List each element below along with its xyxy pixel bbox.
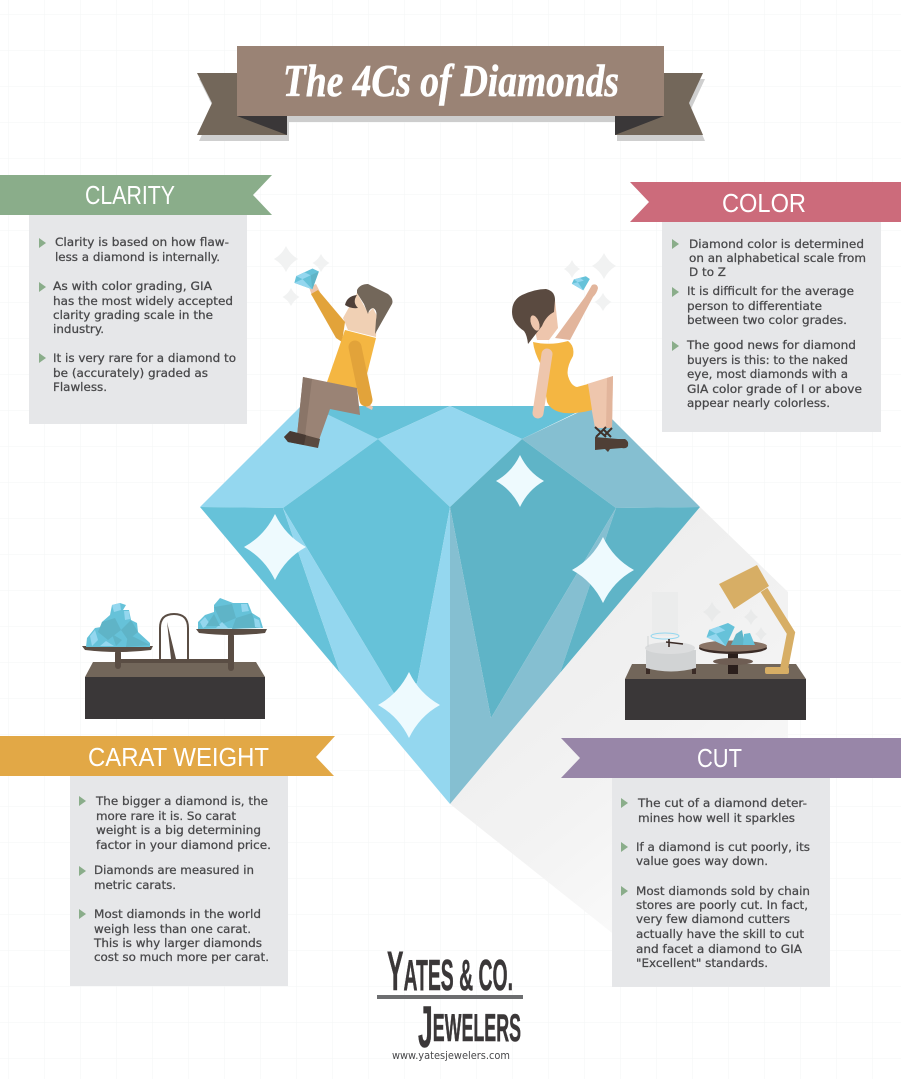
color text box: buyers is this: to the naked — [687, 354, 848, 367]
carat weight banner — [0, 736, 335, 776]
clarity text box: has the most widely accepted — [53, 295, 233, 308]
clarity text box: less a diamond is internally. — [55, 251, 220, 264]
carat weight text box: weigh less than one carat. — [94, 923, 251, 936]
cut heading: CUT — [697, 743, 742, 773]
color text box: on an alphabetical scale from — [689, 252, 866, 265]
cut text box — [612, 778, 830, 987]
clarity text box — [29, 215, 247, 424]
clarity heading: CLARITY — [85, 180, 175, 210]
arm — [538, 354, 547, 413]
carat weight text box: This is why larger diamonds — [93, 937, 262, 950]
left pan — [82, 646, 153, 652]
clarity text box: clarity grading scale in the — [53, 309, 213, 322]
color text box — [662, 222, 881, 432]
cut text box: very few diamond cutters — [636, 913, 790, 926]
cut text box: value goes way down. — [636, 855, 768, 868]
clarity text box: industry. — [53, 323, 104, 336]
balance scale with diamonds — [82, 598, 267, 719]
panel: carat weight — [0, 736, 335, 986]
microscope with glass dome — [645, 592, 696, 674]
clarity text box: Clarity is based on how flaw- — [55, 236, 229, 249]
title text: The 4Cs of Diamonds — [283, 55, 619, 106]
cut banner — [561, 738, 901, 778]
man's head — [343, 293, 377, 337]
carat weight text box: cost so much more per carat. — [94, 951, 269, 964]
shoe — [595, 437, 628, 452]
inspected diamonds — [705, 621, 755, 651]
cut text box: If a diamond is cut poorly, its — [636, 841, 810, 854]
carat weight text box: Most diamonds in the world — [94, 908, 261, 921]
clarity text box: As with color grading, GIA — [53, 280, 212, 293]
website: www.yatesjewelers.com — [392, 1050, 510, 1062]
panel: cut — [561, 738, 901, 987]
round stand — [699, 640, 767, 674]
color text box: D to Z — [689, 266, 726, 279]
color text box: Diamond color is determined — [689, 238, 864, 251]
cut text box: stores are poorly cut. In fact, — [636, 899, 808, 912]
color text box: between two color grades. — [687, 314, 847, 327]
color banner — [630, 182, 901, 222]
carat weight text box: weight is a big determining — [96, 824, 261, 837]
carat weight text box: The bigger a diamond is, the — [95, 795, 268, 808]
logo: Yates & Co. Jewelers: J — [418, 995, 433, 1060]
color text box: eye, most diamonds with a — [687, 368, 848, 381]
cut text box: mines how well it sparkles — [638, 812, 795, 825]
left diamond pile — [86, 603, 150, 647]
color text box: appear nearly colorless. — [687, 397, 830, 410]
carat weight text box: metric carats. — [94, 879, 176, 892]
carat weight text box: factor in your diamond price. — [96, 839, 271, 852]
sparkles — [703, 602, 767, 641]
raised arm — [555, 284, 598, 340]
raised arm — [311, 290, 345, 342]
color heading: COLOR — [722, 188, 806, 218]
panel: color — [630, 182, 901, 432]
cut text box: "Excellent" standards. — [636, 957, 768, 970]
dress — [533, 341, 592, 413]
cut text box: and facet a diamond to GIA — [636, 943, 802, 956]
hair — [512, 289, 555, 344]
man holding diamond — [274, 246, 392, 448]
color text box: GIA color grade of I or above — [687, 383, 862, 396]
shoe — [284, 431, 320, 448]
color text box: It is difficult for the average — [687, 285, 854, 298]
woman's sparkles — [564, 253, 616, 311]
clarity banner — [0, 175, 272, 215]
carat weight heading: CARAT WEIGHT — [88, 742, 269, 772]
carat weight text box: more rare it is. So carat — [96, 810, 237, 823]
lamp — [719, 565, 791, 674]
lower arm — [366, 403, 373, 410]
title ribbon — [197, 46, 705, 141]
text: EWELERS — [433, 1007, 521, 1050]
gem inspection table with lamp — [625, 565, 806, 720]
diamond shadow — [450, 507, 788, 987]
shirt — [327, 330, 376, 390]
woman's diamond — [571, 275, 592, 293]
man's sparkles — [274, 246, 330, 306]
cut text box: The cut of a diamond deter- — [637, 797, 807, 810]
right diamond pile — [198, 598, 263, 629]
clarity text box: It is very rare for a diamond to — [53, 352, 236, 365]
logo: Yates & Co. Jewelers: YATES & CO. — [387, 939, 513, 1002]
face — [533, 300, 558, 340]
sparkles on diamond — [244, 455, 634, 738]
trousers — [297, 377, 360, 440]
cut text box: Most diamonds sold by chain — [636, 885, 810, 898]
right pan — [196, 629, 267, 635]
man's diamond — [292, 267, 325, 295]
logo: Yates & Co. Jewelers — [377, 939, 523, 1062]
cut text box: actually have the skill to cut — [636, 928, 805, 941]
large diamond — [200, 406, 700, 804]
clarity text box: be (accurately) graded as — [53, 367, 208, 380]
clarity text box: Flawless. — [53, 381, 107, 394]
color text box: person to differentiate — [687, 300, 822, 313]
woman holding diamond — [512, 253, 628, 452]
carat weight text box: Diamonds are measured in — [94, 864, 254, 877]
color text box: The good news for diamond — [686, 339, 856, 352]
carat weight text box — [70, 776, 288, 986]
panel: clarity — [0, 175, 272, 424]
leg — [587, 376, 613, 428]
